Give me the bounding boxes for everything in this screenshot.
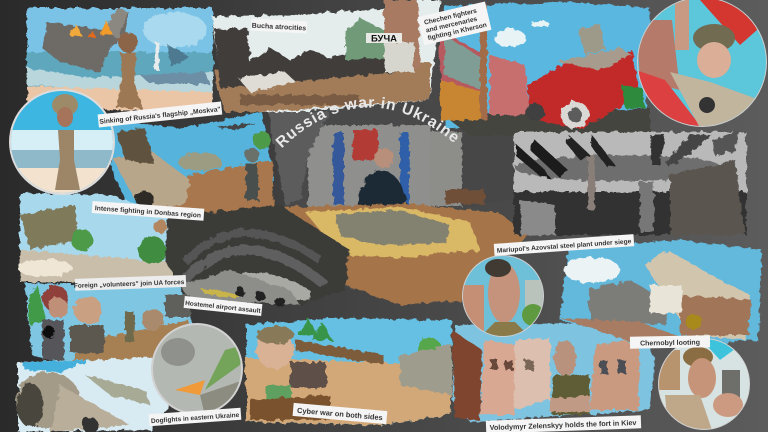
- label: Zelensky: Volodymyr Zelenskyy holds the fort in Kiev: [489, 418, 637, 432]
- label: Bucha: Bucha atrocities: [252, 23, 306, 32]
- sign: Bucha town name: [366, 33, 402, 44]
- label: Mariupol: Mariupol's Azovstal steel plant under siege: [497, 238, 632, 255]
- circle: soldier on beach: [8, 88, 116, 198]
- sign: Bucha town name: БУЧА: [371, 34, 397, 44]
- panel: Bucha atrocities: [212, 0, 440, 112]
- label: Chernobyl: Chernobyl looting: [640, 339, 700, 348]
- panel: sinking of Moskva: [27, 8, 213, 110]
- panel: Zelensky: [452, 322, 655, 422]
- panel: dogfights: [16, 358, 170, 432]
- panel: Chechen fighters in Kherson: [440, 2, 650, 136]
- label: Hostomel: Hostemel airport assault: [185, 300, 262, 315]
- label: Foreign volunteers: [74, 275, 186, 291]
- panel: foreign volunteers: [18, 193, 172, 282]
- panel: Azovstal steel plant: [514, 130, 746, 235]
- circle: grinning man: [462, 255, 545, 337]
- panel: volunteers close-up: [25, 283, 195, 362]
- label: Donbas: Intense fighting in Donbas region: [95, 205, 201, 220]
- label: Cyber war: Cyber war on both sides: [297, 406, 383, 422]
- label: Chernobyl: [630, 335, 710, 349]
- panel: Hostomel airport: [165, 205, 350, 307]
- label: Dogfights: [149, 408, 241, 426]
- panel: intense fighting in Donbas: [108, 112, 275, 212]
- label: Moskva: Sinking of Russia's flagship „Moskva": [99, 106, 221, 126]
- label: Donbas: [92, 201, 204, 221]
- circle: Kadyrov fighter: [636, 0, 768, 128]
- circle: dogfight cockpit: [150, 323, 244, 416]
- title: Russia's war in Ukraine: Russia's war in Ukraine: [275, 97, 458, 148]
- label: Chechen fighters: fighting in Kherson: [427, 22, 488, 42]
- panel: central room: [268, 104, 528, 305]
- label: Foreign volunteers: Foreign „volunteers" join UA forces: [74, 279, 185, 290]
- label: Chechen fighters: and mercenaries: [425, 16, 478, 34]
- panel: cyber war: [246, 318, 452, 425]
- label: Chechen fighters: Chechen fighters: [423, 8, 478, 27]
- circle: looter: [658, 338, 750, 430]
- label: Chechen fighters: [418, 1, 491, 45]
- label: Dogfights: Dogfights in eastern Ukraine: [151, 412, 240, 425]
- panel: Chernobyl looting: [560, 240, 762, 345]
- label: Bucha: [251, 19, 307, 33]
